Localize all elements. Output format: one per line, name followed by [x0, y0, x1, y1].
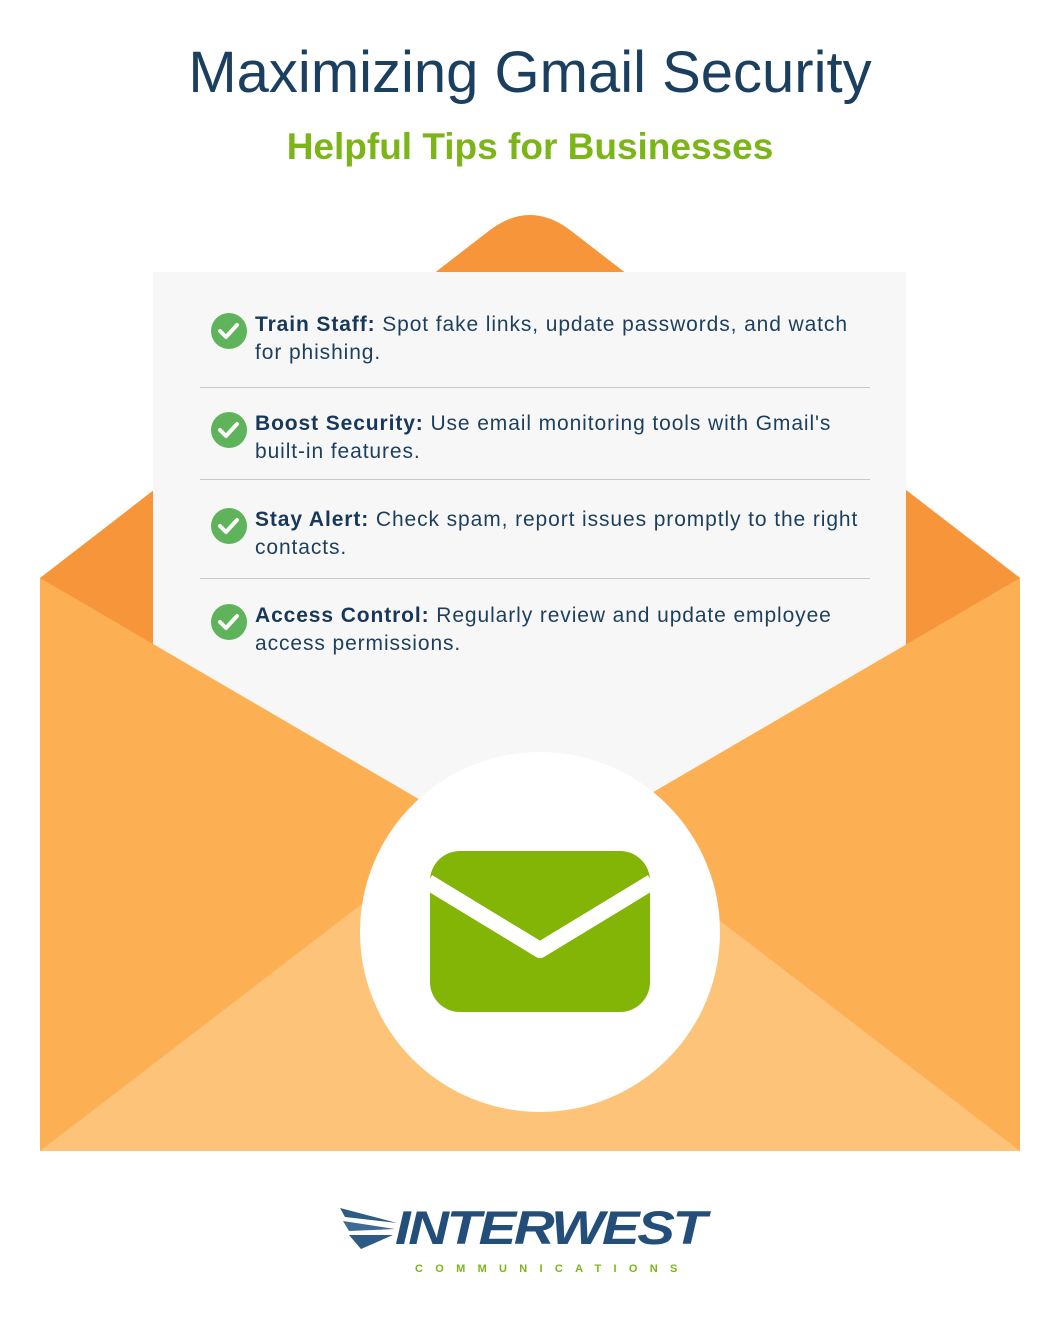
- envelope top flap: [40, 215, 1020, 578]
- subtitle: Helpful Tips for Businesses: [287, 126, 773, 167]
- left side flap: [40, 578, 530, 1151]
- logo: [340, 1201, 711, 1275]
- logo: COMMUNICATIONS: [415, 1263, 690, 1275]
- icon: check: [211, 604, 247, 640]
- tip: train staff: for phishing.: [255, 341, 381, 364]
- white circle: [360, 752, 720, 1112]
- tip: access control: [211, 604, 832, 655]
- envelope back: [40, 578, 1020, 1151]
- tip: boost security: Boost Security: Use email monitoring tools with Gmail's: [255, 412, 831, 435]
- letter paper: [153, 272, 906, 972]
- tip: access control: Access Control: Regularly review and update employee: [255, 604, 832, 627]
- icon: mail: [428, 851, 652, 1012]
- tip: train staff: Train Staff: Spot fake links, update passwords, and watch: [255, 313, 848, 336]
- icon: check: [211, 508, 247, 544]
- tip: stay alert: [211, 508, 858, 559]
- tip: stay alert: Stay Alert: Check spam, report issues promptly to the right: [255, 508, 858, 531]
- tip: boost security: [211, 412, 831, 463]
- icon: check: [211, 412, 247, 448]
- logo swoosh: [340, 1208, 397, 1249]
- logo wordmark: INTERWEST: [395, 1201, 705, 1254]
- tip: stay alert: contacts.: [255, 536, 347, 559]
- title: Maximizing Gmail Security: [188, 40, 872, 105]
- icon: check: [211, 313, 247, 349]
- tip: access control: access permissions.: [255, 632, 461, 655]
- bottom flap: [40, 775, 1020, 1151]
- tip: train staff: [211, 313, 848, 364]
- tip: boost security: built-in features.: [255, 440, 421, 463]
- right side flap: [530, 578, 1020, 1151]
